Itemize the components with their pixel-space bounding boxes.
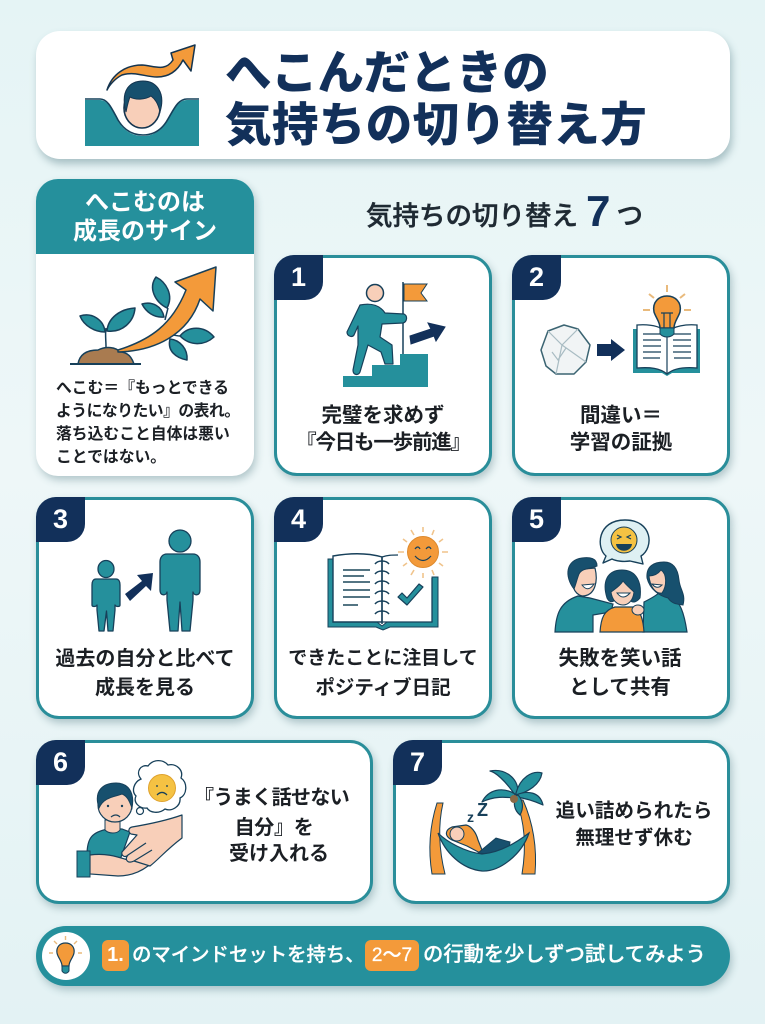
card text: 完璧を求めず	[322, 404, 444, 427]
card text line 3: 受け入れる	[229, 843, 329, 865]
icon: hammock and palm tree	[429, 770, 544, 874]
footer text part 2: の行動を少しずつ試してみよう	[423, 944, 706, 966]
card text line 2: 成長を見る	[95, 677, 195, 699]
card text line 2: 無理せず休む	[575, 827, 693, 849]
card text: 過去の自分と比べて	[55, 648, 235, 670]
section heading: 気持ちの切り替え7つ	[366, 187, 643, 236]
panel heading: へこむのは	[85, 189, 205, 216]
card text line 2: 自分』を	[235, 817, 313, 839]
card text: 『うまく話せない	[194, 787, 349, 809]
card text: 追い詰められたら	[556, 800, 712, 822]
number badge	[512, 497, 561, 542]
card text: 間違い＝	[580, 404, 662, 427]
card 3	[34, 496, 260, 728]
icon: climbing stairs with flag	[343, 282, 446, 387]
number badge	[512, 255, 561, 300]
number badge	[36, 740, 85, 785]
icon: worried boy and supporting hands	[76, 760, 186, 878]
left person	[555, 558, 613, 632]
number badge: 7	[410, 747, 425, 777]
footer banner	[36, 926, 730, 986]
number badge	[36, 497, 85, 542]
footer badge 1	[102, 940, 129, 971]
number badge	[274, 255, 323, 300]
number badge: 2	[529, 262, 544, 292]
right person	[643, 562, 687, 632]
icon: sprout and rising arrow	[70, 266, 217, 365]
icon: head in a dip with rising arrow	[85, 44, 199, 146]
card 6	[34, 740, 379, 912]
card text: できたことに注目して	[288, 648, 478, 669]
card text line 2: 『今日も一歩前進』	[296, 431, 470, 454]
card text line 2: 学習の証拠	[570, 431, 672, 454]
number badge: 3	[53, 504, 68, 534]
card text line 2: ポジティブ日記	[315, 677, 451, 699]
panel: growth sign	[34, 178, 260, 484]
footer badge 2: 2〜7	[372, 945, 412, 966]
panel body text	[56, 379, 240, 466]
icon: diary, check and sun	[328, 527, 448, 630]
icon: small and tall self with arrow	[91, 529, 201, 632]
number badge: 1	[291, 262, 306, 292]
footer text part 1: のマインドセットを持ち、	[132, 944, 365, 966]
panel body text: 落ち込むこと自体は悪い	[56, 426, 230, 443]
number badge: 5	[529, 504, 544, 534]
icon: hammock and palm tree: Z	[477, 800, 488, 820]
title: へこんだときの	[225, 47, 548, 99]
number badge: 6	[53, 747, 68, 777]
panel heading: 成長のサイン	[73, 218, 217, 245]
card 4	[272, 496, 498, 728]
icon: light bulb	[42, 932, 90, 980]
footer badge 1: 1.	[107, 944, 124, 966]
icon: crumpled paper to book and bulb	[540, 285, 700, 376]
card 7	[391, 740, 736, 912]
icon: three people laughing	[554, 519, 688, 633]
card 2	[510, 254, 736, 484]
card 5	[510, 496, 736, 728]
panel heading	[36, 179, 254, 254]
number badge	[393, 740, 442, 785]
header panel	[33, 31, 737, 169]
center person	[600, 570, 644, 632]
card 1	[272, 254, 498, 484]
panel body text: へこむ＝『もっとできる	[56, 380, 229, 397]
card text: 失敗を笑い話	[558, 647, 682, 670]
footer badge 2	[365, 940, 419, 971]
card text line 2: として共有	[569, 676, 671, 699]
number badge: 4	[291, 504, 306, 534]
panel body text: ことではない。	[56, 449, 166, 466]
icon: hammock and palm tree: z	[467, 809, 474, 825]
panel body text: ようになりたい』の表れ。	[56, 403, 240, 420]
number badge	[274, 497, 323, 542]
title	[225, 47, 647, 151]
title: 気持ちの切り替え方	[225, 99, 647, 151]
